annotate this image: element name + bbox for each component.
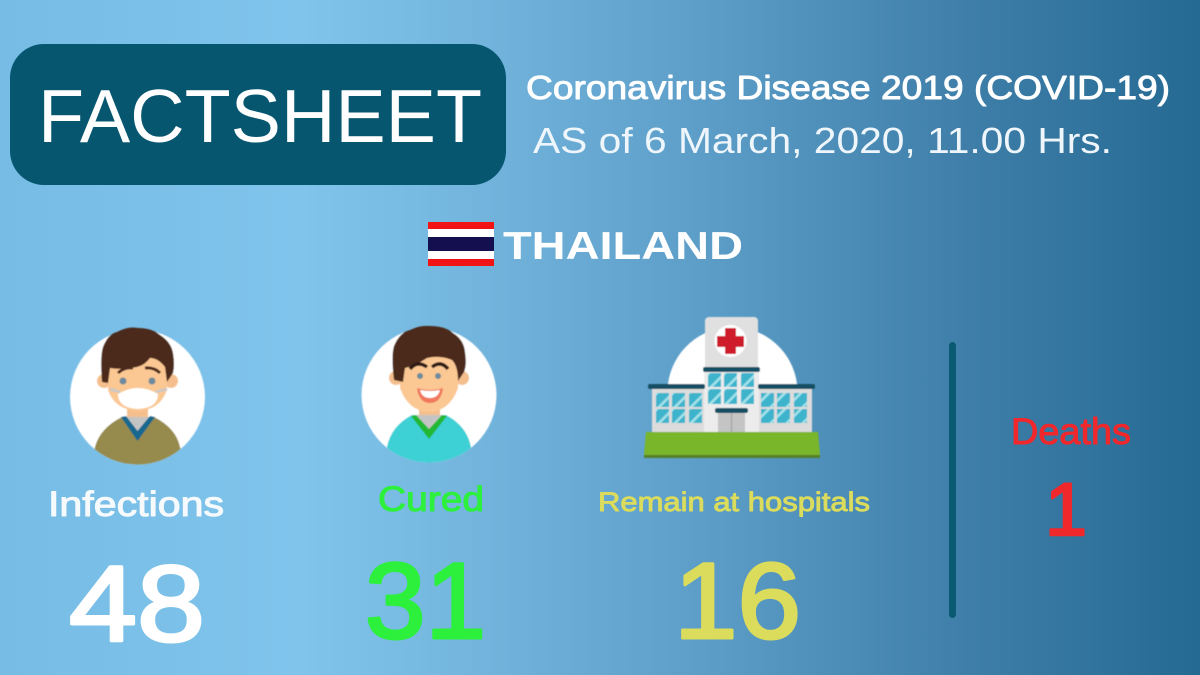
factsheet badge xyxy=(10,44,506,185)
stat: infections xyxy=(48,485,224,664)
stat: deaths: 1 xyxy=(1045,468,1087,551)
stat: cured: 31 xyxy=(365,540,486,661)
factsheet badge: FACTSHEET xyxy=(38,74,482,158)
stat: cured xyxy=(365,480,486,661)
icon: hospital building xyxy=(644,317,820,458)
icon: cured person avatar xyxy=(362,326,496,470)
stat: remain at hospitals xyxy=(598,487,870,661)
hospital windows xyxy=(656,373,807,423)
stat: remain at hospitals: Remain at hospitals xyxy=(598,487,870,517)
stat: remain at hospitals: 16 xyxy=(674,540,801,661)
stat: deaths: Deaths xyxy=(1011,411,1131,452)
stat: cured: Cured xyxy=(378,480,484,519)
title: disease name: Coronavirus Disease 2019 (COVID-19) xyxy=(526,69,1170,106)
stat: infections: 48 xyxy=(69,543,205,664)
divider xyxy=(949,342,956,618)
icon: masked patient avatar xyxy=(70,328,205,470)
icon: Thailand flag xyxy=(428,222,494,266)
country name: THAILAND xyxy=(503,225,743,268)
stat: deaths xyxy=(1011,411,1131,551)
date line: AS of 6 March, 2020, 11.00 Hrs. xyxy=(533,120,1112,161)
stat: infections: Infections xyxy=(48,485,224,524)
